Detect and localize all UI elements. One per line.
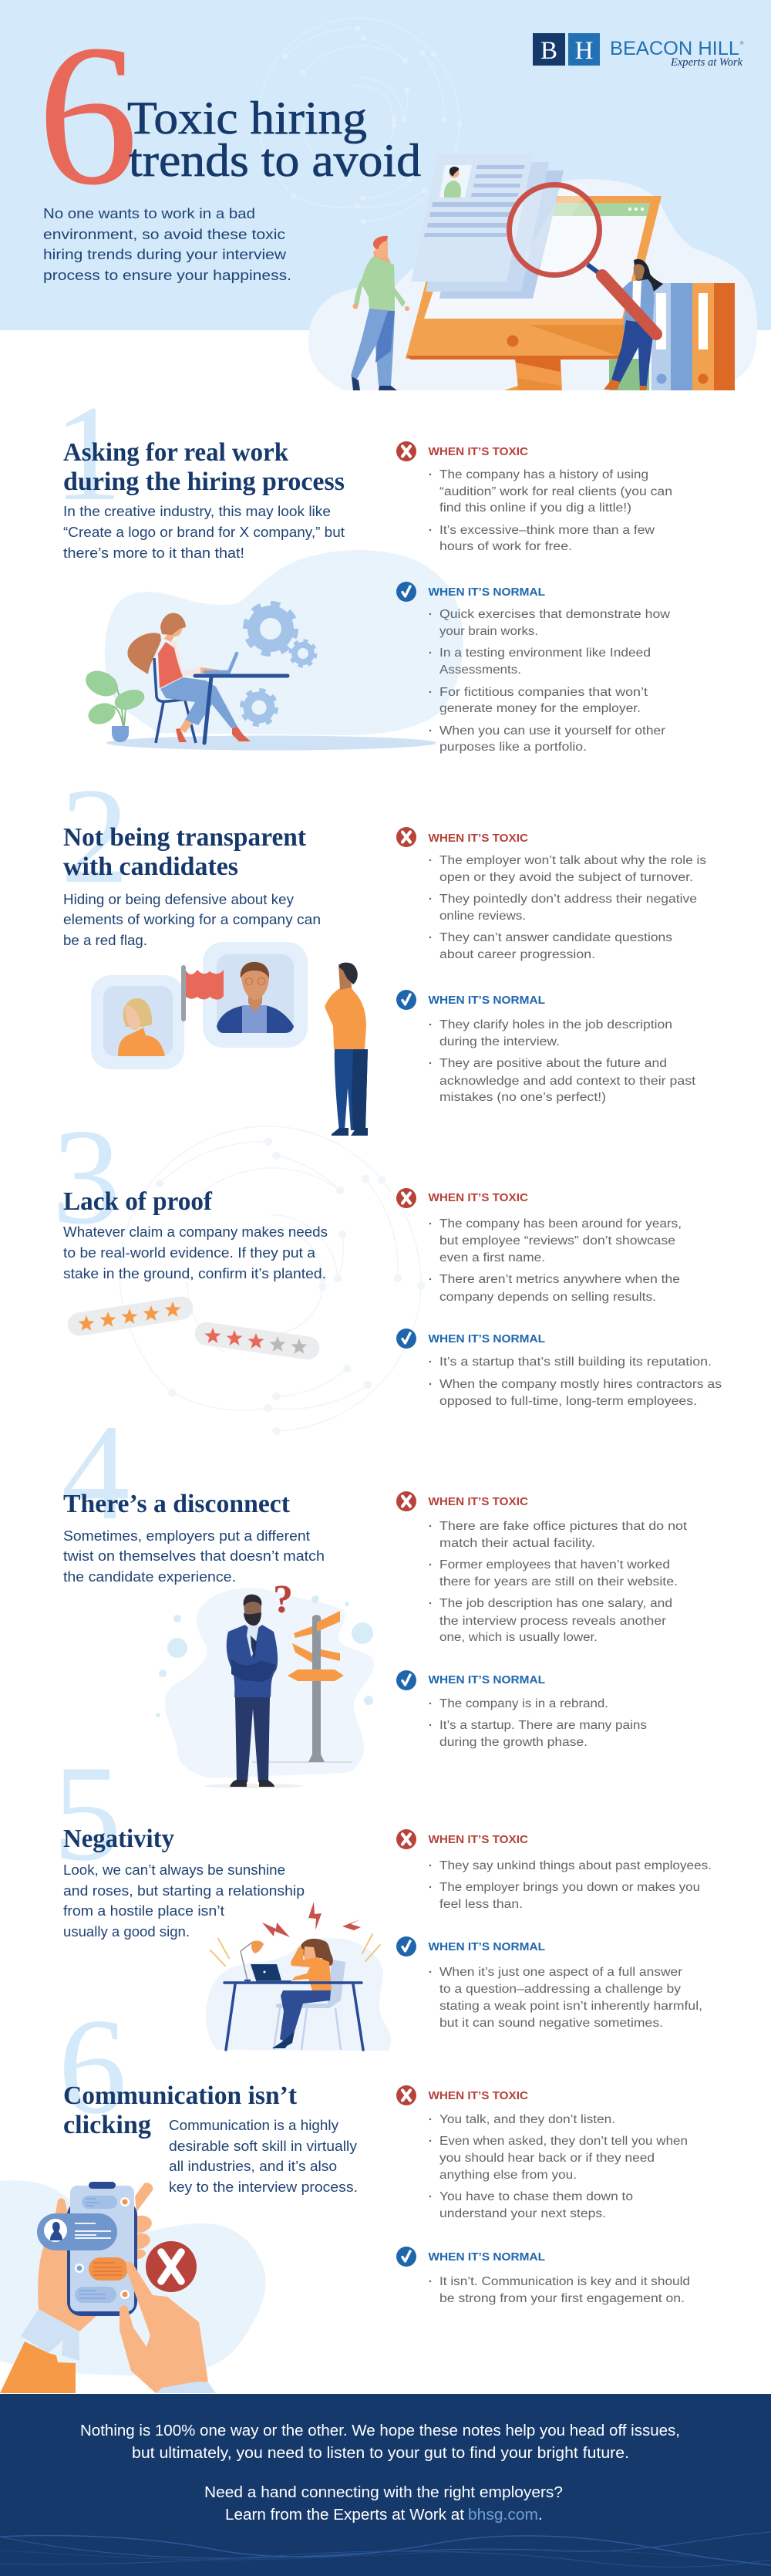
illustration: red flag profiles: [91, 942, 368, 1136]
normal list 3: [429, 1356, 722, 1408]
normal list 6: be strong from your first engagement on.: [439, 2292, 685, 2305]
normal list 1: your brain works.: [439, 625, 538, 638]
toxic list 2: [429, 854, 706, 961]
normal list 1: generate money for the employer.: [439, 702, 641, 715]
toxic list 2: about career progression.: [439, 948, 595, 961]
title: trends to avoid: [129, 135, 421, 186]
heading 2: Not being transparent: [63, 823, 307, 852]
normal list 3: opposed to full-time, long-term employees.: [439, 1395, 697, 1408]
man: [227, 1595, 278, 1787]
toxic list 4: The job description has one salary, and: [439, 1597, 672, 1610]
hero blob: [308, 179, 757, 390]
normal list 2: [429, 1018, 696, 1104]
heading 1: Asking for real work: [63, 438, 288, 467]
heading 2: [63, 823, 307, 881]
normal list 1: [429, 608, 671, 754]
normal list 4: The company is in a rebrand.: [439, 1697, 608, 1710]
right profile card: [203, 942, 308, 1048]
text 2: elements of working for a company can: [63, 911, 321, 927]
intro text: process to ensure your happiness.: [43, 267, 291, 283]
title: Toxic hiring: [127, 93, 367, 143]
normal list 3: It’s a startup that’s still building its reputation.: [439, 1356, 712, 1369]
text 6: all industries, and it’s also: [169, 2158, 337, 2174]
gears: [242, 604, 315, 724]
table and laptop: [195, 676, 288, 743]
icon: normal: [396, 1329, 416, 1349]
toxic list 4: match their actual facility.: [439, 1537, 595, 1550]
text 6: desirable soft skill in virtually: [169, 2138, 358, 2154]
icon: toxic: [396, 827, 416, 847]
monitor: [406, 196, 662, 390]
header background: [0, 0, 771, 330]
text 6: Communication is a highly: [169, 2117, 339, 2133]
text 5: [63, 1862, 305, 1940]
floor: [106, 736, 436, 750]
phone: [37, 2182, 137, 2316]
icon: normal: [396, 990, 416, 1010]
normal list 2: They clarify holes in the job description: [439, 1018, 672, 1031]
intro text: environment, so avoid these toxic: [43, 226, 285, 242]
woman: [127, 613, 251, 742]
intro text: [43, 205, 291, 283]
text 4: Sometimes, employers put a different: [63, 1528, 310, 1544]
lightning bolts: [262, 1902, 361, 1938]
normal list 1: Assessments.: [439, 663, 521, 677]
shadow: [204, 1784, 303, 1788]
illustration: hands holding phone: [0, 2180, 266, 2393]
flag: [181, 965, 224, 1021]
text 5: Look, we can’t always be sunshine: [63, 1862, 285, 1878]
logo: Beacon Hill: H: [575, 37, 593, 65]
normal list 2: during the interview.: [439, 1035, 560, 1048]
heading 2: with candidates: [63, 852, 238, 881]
text 3: Whatever claim a company makes needs: [63, 1224, 328, 1240]
normal list 1: In a testing environment like Indeed: [439, 647, 651, 660]
text 2: Hiding or being defensive about key: [63, 891, 295, 907]
text 3: stake in the ground, confirm it’s planted.: [63, 1265, 326, 1281]
call to action: Learn from the Experts at Work at: [225, 2507, 464, 2524]
icon: toxic: [396, 441, 416, 461]
closing text: Nothing is 100% one way or the other. We hope these notes help you head off issues,: [80, 2422, 680, 2439]
normal list 5: [429, 1966, 702, 2030]
label: when toxic: WHEN IT’S TOXIC: [429, 832, 528, 845]
heading 6: [63, 2081, 298, 2139]
red x badge: [146, 2241, 197, 2292]
toxic list 1: The company has a history of using: [439, 468, 648, 481]
label: when toxic: WHEN IT’S TOXIC: [429, 445, 528, 458]
toxic list 6: [429, 2113, 688, 2220]
normal list 1: For fictitious companies that won’t: [439, 686, 648, 699]
icon: toxic: [396, 1829, 416, 1849]
text 5: usually a good sign.: [63, 1923, 190, 1940]
text 1: In the creative industry, this may look like: [63, 503, 331, 519]
icon: toxic: [396, 1188, 416, 1208]
toxic list 3: even a first name.: [439, 1251, 545, 1264]
label: when normal: WHEN IT’S NORMAL: [429, 1332, 545, 1345]
icon: normal: [396, 1670, 416, 1690]
toxic list 1: [429, 468, 672, 553]
icon: normal: [396, 582, 416, 602]
toxic list 6: Even when asked, they don’t tell you when: [439, 2135, 688, 2148]
chair: [154, 658, 196, 743]
text 1: [63, 503, 345, 561]
toxic list 6: You have to chase them down to: [439, 2190, 633, 2203]
normal list 5: stating a weak point isn’t inherently harmful,: [439, 2000, 702, 2013]
normal list 2: acknowledge and add context to their past: [439, 1075, 696, 1088]
text 4: twist on themselves that doesn’t match: [63, 1548, 325, 1564]
footer panel: [0, 2394, 771, 2576]
toxic list 5: The employer brings you down or makes you: [439, 1881, 700, 1894]
toxic list 1: It’s excessive–think more than a few: [439, 524, 655, 537]
normal list 1: purposes like a portfolio.: [439, 741, 587, 754]
signpost: [252, 1611, 352, 1763]
toxic list 1: hours of work for free.: [439, 540, 572, 553]
footer waves: [0, 2532, 771, 2567]
chat bubbles: [37, 2196, 130, 2303]
title: [127, 93, 421, 186]
toxic list 4: one, which is usually lower.: [439, 1631, 598, 1644]
toxic list 6: anything else from you.: [439, 2169, 577, 2182]
woman: [272, 1939, 333, 2048]
toxic list 6: You talk, and they don’t listen.: [439, 2113, 615, 2126]
section 5 number: 5: [52, 1737, 122, 1889]
toxic list 3: The company has been around for years,: [439, 1217, 682, 1231]
yellow rays: [210, 1934, 380, 1966]
heading 3: Lack of proof: [63, 1187, 213, 1216]
logo: Beacon Hill: B: [540, 37, 557, 65]
label: when toxic: WHEN IT’S TOXIC: [429, 1191, 528, 1204]
illustration: stressed woman at desk: [206, 1902, 391, 2051]
toxic list 4: the interview process reveals another: [439, 1615, 666, 1628]
call to action: Need a hand connecting with the right employers?: [204, 2484, 563, 2501]
toxic list 3: company depends on selling results.: [439, 1291, 656, 1304]
section 6 number: 6: [59, 1990, 126, 2142]
normal list 6: It isn’t. Communication is key and it should: [439, 2275, 690, 2288]
heading 6: clicking: [63, 2111, 151, 2139]
heading 1: [63, 438, 345, 496]
normal list 1: When you can use it yourself for other: [439, 724, 665, 738]
call to action: [204, 2484, 563, 2524]
toxic list 6: you should hear back or if they need: [439, 2152, 655, 2165]
label: when toxic: WHEN IT’S TOXIC: [429, 1833, 528, 1846]
logo: Beacon Hill: [533, 33, 744, 69]
left profile card: [91, 975, 184, 1069]
binders: [609, 283, 735, 390]
section 3 concentric decoration: [120, 1126, 425, 1435]
text 3: to be real-world evidence. If they put a: [63, 1244, 316, 1261]
blob: [165, 1588, 374, 1778]
toxic list 4: there for years are still on their website.: [439, 1575, 678, 1588]
plant: [82, 666, 147, 742]
text 1: “Create a logo or brand for X company,” but: [63, 524, 345, 540]
hero illustration: resume review at monitor: [308, 154, 757, 390]
label: when toxic: WHEN IT’S TOXIC: [429, 2089, 528, 2102]
man standing: [351, 236, 409, 390]
text 4: the candidate experience.: [63, 1568, 236, 1585]
desk: [224, 1983, 363, 2050]
toxic list 2: They can’t answer candidate questions: [439, 931, 672, 944]
label: when normal: WHEN IT’S NORMAL: [429, 1673, 545, 1686]
normal list 2: They are positive about the future and: [439, 1057, 667, 1070]
closing text: but ultimately, you need to listen to your gut to find your bright future.: [132, 2445, 629, 2462]
normal list 3: When the company mostly hires contractors as: [439, 1378, 722, 1391]
chair: [274, 1960, 345, 2050]
toxic list 4: [429, 1520, 688, 1644]
icon: toxic: [396, 1491, 416, 1511]
logo: Beacon Hill: Experts at Work: [670, 56, 743, 69]
text 5: from a hostile place isn’t: [63, 1902, 224, 1919]
text 5: and roses, but starting a relationship: [63, 1882, 305, 1899]
toxic list 3: [429, 1217, 682, 1304]
toxic list 4: There are fake office pictures that do not: [439, 1520, 688, 1533]
normal list 5: to a question–addressing a challenge by: [439, 1983, 681, 1996]
normal list 4: [429, 1697, 647, 1749]
toxic list 2: open or they avoid the subject of turnover.: [439, 871, 693, 884]
normal list 2: mistakes (no one’s perfect!): [439, 1091, 606, 1104]
toxic list 1: find this online if you dig a little!): [439, 501, 631, 515]
intro text: No one wants to work in a bad: [43, 205, 255, 221]
sleeves: [0, 2309, 216, 2393]
icon: toxic: [396, 2085, 416, 2105]
normal list 5: When it’s just one aspect of a full answer: [439, 1966, 682, 1979]
bubbles: [156, 1595, 373, 1717]
toxic list 2: online reviews.: [439, 910, 526, 923]
heading 6: Communication isn’t: [63, 2081, 298, 2110]
label: when normal: WHEN IT’S NORMAL: [429, 586, 545, 599]
blob: [206, 1938, 391, 2051]
big number 6: 6: [37, 3, 139, 227]
label: when normal: WHEN IT’S NORMAL: [429, 1940, 545, 1953]
toxic list 6: understand your next steps.: [439, 2207, 606, 2220]
toxic list 5: feel less than.: [439, 1898, 523, 1911]
back hand fingers: [126, 2183, 153, 2260]
blob: [105, 550, 463, 735]
toxic list 5: They say unkind things about past employees.: [439, 1859, 712, 1872]
text 1: there’s more to it than that!: [63, 545, 244, 561]
label: when normal: WHEN IT’S NORMAL: [429, 2250, 545, 2264]
toxic list 2: They pointedly don’t address their negative: [439, 893, 697, 906]
logo: Beacon Hill: BEACON HILL: [610, 38, 739, 59]
section 2 number: 2: [60, 759, 130, 912]
question mark: ?: [273, 1578, 293, 1622]
section 1 number: 1: [54, 376, 122, 529]
toxic list 3: but employee “reviews” don’t showcase: [439, 1234, 675, 1247]
header concentric decoration: [258, 19, 463, 224]
normal list 1: Quick exercises that demonstrate how: [439, 608, 671, 621]
resume papers: [411, 154, 564, 299]
toxic list 3: There aren’t metrics anywhere when the: [439, 1273, 680, 1286]
call to action: .: [538, 2507, 543, 2524]
section 4 number: 4: [62, 1396, 130, 1548]
icon: normal: [396, 1936, 416, 1956]
normal list 6: [429, 2275, 690, 2305]
lamp: [241, 1941, 264, 1980]
illustration: woman at laptop with gears: [82, 550, 463, 750]
closing text: [80, 2422, 680, 2462]
logo: Beacon Hill: ®: [740, 41, 744, 46]
call to action: bhsg.com: [468, 2507, 538, 2524]
three star rating pill: [194, 1321, 321, 1361]
heading 1: during the hiring process: [63, 468, 345, 496]
normal list 5: but it can sound negative sometimes.: [439, 2017, 663, 2030]
section 3 number: 3: [52, 1100, 120, 1253]
text 4: [63, 1528, 325, 1585]
toxic list 2: The employer won’t talk about why the role is: [439, 854, 706, 867]
five star rating pill: [66, 1295, 194, 1338]
heading 4: There’s a disconnect: [63, 1490, 291, 1518]
text 2: be a red flag.: [63, 932, 147, 948]
right hand: [120, 2262, 208, 2393]
heading 5: Negativity: [63, 1825, 174, 1853]
toxic list 4: Former employees that haven’t worked: [439, 1558, 670, 1572]
illustration: man at signpost: [156, 1578, 374, 1788]
laptop: [251, 1964, 291, 1981]
icon: normal: [396, 2247, 416, 2267]
text 2: [63, 891, 321, 948]
text 6: key to the interview process.: [169, 2179, 358, 2195]
label: when toxic: WHEN IT’S TOXIC: [429, 1495, 528, 1508]
woman holding magnifier: [602, 259, 663, 390]
intro text: hiring trends during your interview: [43, 246, 287, 262]
toxic list 1: “audition” work for real clients (you can: [439, 485, 672, 498]
left hand: [38, 2198, 96, 2331]
normal list 4: It’s a startup. There are many pains: [439, 1719, 647, 1732]
toxic list 5: [429, 1859, 712, 1911]
magnifying glass: [508, 184, 602, 276]
text 3: [63, 1224, 328, 1281]
normal list 4: during the growth phase.: [439, 1736, 588, 1749]
standing man: [325, 963, 368, 1136]
blob: [0, 2180, 266, 2375]
text 6: [169, 2117, 358, 2195]
label: when normal: WHEN IT’S NORMAL: [429, 994, 545, 1007]
